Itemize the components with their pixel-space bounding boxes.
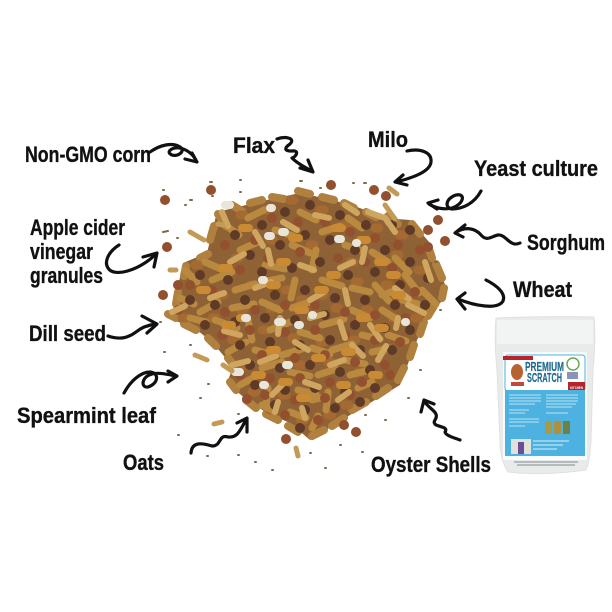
label: Flax: Flax [233,133,276,158]
red banner [503,356,533,360]
stray oats [170,188,397,456]
orange grains [200,228,402,398]
arrow: yeast [428,191,481,209]
bag seal [497,320,593,344]
label: Apple cider vinegar granules: vinegar [30,239,93,264]
arrow: oats [191,418,247,453]
label: Oats: Oats [123,450,164,475]
product title: SCRATCH [527,370,562,385]
label: Milo [368,127,431,185]
light grains [172,205,431,418]
arrow: vinegar granules [106,245,157,272]
label: Dill seed [29,316,157,346]
oyster shell pieces [225,205,406,385]
product bag [495,317,595,474]
seed pile [160,180,447,470]
bag body [495,317,595,474]
product title [525,359,564,385]
label: Flax [233,133,313,172]
oat grains [180,210,436,428]
label: Yeast culture: Yeast culture [474,156,598,181]
label: Wheat: Wheat [513,277,573,302]
label: Oats [123,418,247,475]
arrow: flax [277,138,313,172]
dark seeds [190,205,428,428]
footer text lines [514,462,578,465]
edge grains [168,191,444,436]
label: Apple cider vinegar granules: Apple cider [30,215,125,240]
pile base silhouette [167,193,447,440]
label: Milo: Milo [368,127,408,152]
header outline [505,355,585,391]
label: Dill seed: Dill seed [29,321,106,346]
panel text lines [509,395,578,426]
product title: PREMIUM [525,359,564,374]
label: Wheat [457,277,573,309]
red kitchen tag: KITCHEN [570,386,583,390]
photo of person [511,439,531,454]
label: Apple cider vinegar granules: granules [30,263,103,288]
arrow: milo [395,150,431,185]
arrow: spearmint [124,371,177,393]
welcome text lines [533,441,569,449]
flag badge [567,372,578,379]
label: Non-GMO corn: Non-GMO corn [25,142,151,167]
label white area [503,352,587,460]
arrow: oyster shells [421,400,460,440]
label: Sorghum [455,225,605,255]
hen icon [511,364,523,380]
scattered debris [160,180,441,470]
arrow: dill seed [108,316,157,338]
arrow: wheat [457,280,504,309]
red seeds [163,185,445,439]
brand text [511,382,524,386]
arrow: corn [150,145,197,162]
label: Apple cider vinegar granules [30,215,157,288]
red kitchen tag [568,382,585,391]
label: Oyster Shells [371,400,491,477]
label: Spearmint leaf: Spearmint leaf [17,403,157,428]
label: Yeast culture [428,156,598,209]
non-GMO badge [567,358,579,370]
arrow: sorghum [455,225,520,244]
jars [545,421,570,434]
blue panel [505,390,585,456]
label: Spearmint leaf [17,371,177,428]
label: Oyster Shells: Oyster Shells [371,452,491,477]
filler seeds [182,200,422,420]
